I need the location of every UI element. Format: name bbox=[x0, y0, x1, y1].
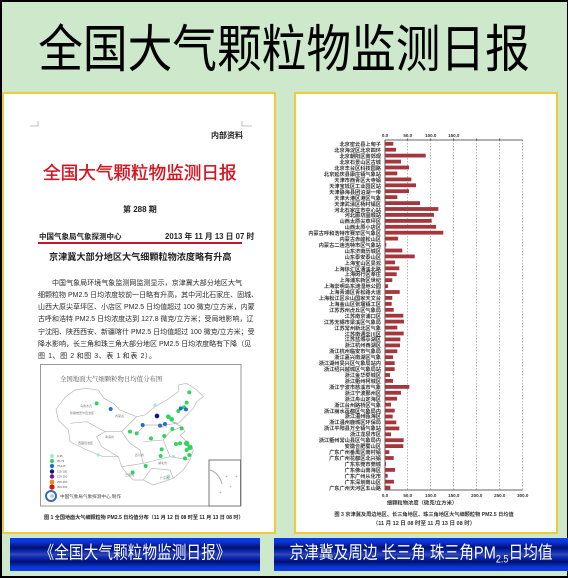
top axis labels: 50.0 bbox=[403, 133, 413, 138]
station labels: 上海青浦区青松路大道 bbox=[329, 288, 382, 296]
chart caption date: （11 月 12 日 08 时至 11 月 13 日 08 时） bbox=[373, 519, 475, 527]
station labels: 安徽合肥蜀山区 bbox=[345, 442, 381, 450]
station labels: 北京密云县上甸子 bbox=[339, 140, 381, 148]
bottom axis labels bbox=[382, 493, 529, 498]
station labels: 广东广州从化市 bbox=[345, 472, 381, 480]
station labels: 江苏盐城亭湖区 bbox=[345, 335, 381, 343]
station labels: 上海宝山区吴淞 bbox=[345, 259, 382, 267]
chart caption: 图 3 京津冀及周边地区、长三角地区、珠三角地区大气细颗粒物 PM2.5 日均值 bbox=[334, 510, 514, 518]
document page contents bbox=[30, 121, 258, 521]
banner: daily report: 《全国大气颗粒物监测日报》 bbox=[40, 544, 230, 564]
legend bbox=[49, 454, 68, 490]
station labels: 天津静海县团泊湖一带 bbox=[329, 188, 381, 196]
station labels: 天津武清区杨村镇区 bbox=[334, 200, 381, 208]
bottom axis labels: 150.0 bbox=[448, 493, 460, 498]
document red title: 全国大气颗粒物监测日报 bbox=[43, 163, 237, 183]
station labels: 江苏常州新北区气象 bbox=[334, 324, 382, 332]
bottom axis labels: 0.0 bbox=[382, 493, 389, 498]
station labels: 天津宝坻区工业园区站 bbox=[329, 182, 382, 190]
station labels: 上海松江区佘山国家天文台 bbox=[319, 294, 381, 302]
station labels: 浙江衢州常山县区气象局内 bbox=[319, 436, 381, 444]
station labels: 河北石家庄市中心站 bbox=[334, 206, 382, 214]
city labels bbox=[70, 403, 169, 480]
banner: PM2.5 daily average: 京津冀及周边 长三角 珠三角PM2.5日均值 bbox=[289, 544, 553, 565]
legend: 35-75 bbox=[57, 459, 65, 463]
city labels: 云南省 bbox=[125, 472, 134, 477]
city labels: 新疆维吾尔自治区 bbox=[70, 410, 94, 415]
city labels: 西藏自治区 bbox=[78, 440, 93, 445]
station labels: 广东东莞市莞城 bbox=[345, 460, 382, 468]
page corner marks bbox=[30, 121, 252, 126]
document headline: 京津冀大部分地区大气细颗粒物浓度略有升高 bbox=[49, 252, 232, 262]
top axis labels: 100.0 bbox=[425, 133, 437, 138]
china map bbox=[56, 383, 203, 485]
station labels: 上海崇明岛东滩湿地公园 bbox=[324, 282, 381, 290]
station labels bbox=[308, 140, 382, 492]
bottom axis labels: 50.0 bbox=[403, 493, 413, 498]
station labels: 江苏苏州虎丘区气象局 bbox=[329, 306, 381, 314]
city labels: 北京市 bbox=[158, 423, 167, 428]
station labels: 上海金山区张堰镇工区 bbox=[329, 300, 381, 308]
station labels: 江苏南京浦口区 bbox=[345, 312, 381, 320]
station labels: 山西太原尖草坪区 bbox=[339, 217, 381, 225]
station labels: 广东广州天河区五山路 bbox=[329, 484, 382, 492]
city labels: 四川省 bbox=[135, 452, 144, 457]
station labels: 江苏无锡市梁溪区气象局 bbox=[324, 318, 381, 326]
station labels: 江苏南通崇川区 bbox=[345, 330, 381, 338]
issuer: 中国气象局气象探测中心 bbox=[39, 232, 122, 241]
station labels: 广东广州番禺区南村镇 bbox=[329, 448, 382, 456]
banner: PM2.5 daily average bbox=[274, 538, 568, 571]
station labels: 浙江龙泉市区 bbox=[350, 430, 381, 438]
station labels: 浙江平阳县万全镇气象站 bbox=[324, 424, 382, 432]
grid lines bbox=[408, 140, 523, 490]
station labels: 浙江绍兴越城区气象局站 bbox=[324, 365, 382, 373]
station labels: 广东佛山南海区 bbox=[345, 466, 381, 474]
station labels: 上海浦东新区世纪 bbox=[339, 276, 382, 284]
station labels: 山东泰安泰山区 bbox=[345, 253, 381, 261]
logo bbox=[46, 491, 56, 501]
top axis labels: 0.0 bbox=[382, 133, 389, 138]
axis title: 细颗粒物浓度（微克/立方米） bbox=[387, 498, 457, 506]
station labels: 北京延庆县康庄镇气象站 bbox=[324, 170, 382, 178]
body paragraph: 图 1、图 2 和图 3、表 1 和表 2）。 bbox=[38, 353, 156, 360]
station labels: 山东济南历城区 bbox=[345, 247, 381, 255]
legend: 350-500 bbox=[57, 485, 68, 489]
label: internal document: 内部资料 bbox=[211, 131, 243, 140]
date: 2013 年 11 月 13 日 07 时 bbox=[165, 232, 254, 241]
axes bbox=[385, 138, 523, 490]
legend: 150-250 bbox=[57, 474, 68, 478]
station labels: 浙江宁波市慈溪市气象 bbox=[329, 383, 382, 391]
body paragraph: 山西大原尖草坪区、小店区 PM2.5 日均值超过 100 微克/立方米，内蒙 bbox=[38, 304, 255, 311]
station labels: 北京海淀区北京四环 bbox=[334, 146, 381, 154]
station labels: 上海闵行区莘庄 bbox=[345, 270, 381, 278]
station labels: 广东深圳南山区 bbox=[345, 478, 381, 486]
station labels: 浙江金华婺城区 bbox=[345, 371, 381, 379]
producer credit: 中国气象局气象探测中心 制作 bbox=[60, 493, 121, 500]
station labels: 浙江丽水莲都区气象局内 bbox=[324, 407, 381, 415]
issue number: 第 288 期 bbox=[123, 205, 157, 214]
station labels: 浙江温州鹿城区环保局 bbox=[329, 418, 381, 426]
body paragraph: 中国气象局环境气象监测网监测显示，京津冀大部分地区大气 bbox=[52, 280, 242, 287]
station labels: 北京石景山区古城 bbox=[339, 158, 382, 166]
map figure bbox=[40, 364, 242, 506]
station labels: 北京丰台区科技园路 bbox=[334, 164, 382, 172]
red rule bbox=[38, 242, 242, 244]
station labels: 上海徐汇区漕溪北路 bbox=[334, 265, 382, 273]
station labels: 浙江杭州临安市气象局 bbox=[329, 347, 381, 355]
station labels: 内蒙古二连浩特市区气象站 bbox=[319, 241, 382, 249]
station labels: 浙江衢州柯城区 bbox=[345, 377, 381, 385]
station labels: 浙江宁波鄞州区 bbox=[345, 389, 381, 397]
station labels: 山西太原小店区 bbox=[345, 223, 381, 231]
panel: PM2.5 bar chart page bbox=[294, 92, 558, 534]
station labels: 浙江台州路桥区气象 bbox=[334, 401, 382, 409]
legend: 75-115 bbox=[57, 464, 66, 468]
station labels: 天津大港区港区气象 bbox=[334, 194, 382, 202]
legend: 250-350 bbox=[57, 480, 68, 484]
station labels: 浙江杭州西湖区 bbox=[345, 341, 381, 349]
bottom axis labels: 250.0 bbox=[494, 493, 506, 498]
city labels: 青海省 bbox=[105, 434, 114, 439]
station labels: 内蒙古赤峰松山区 bbox=[339, 235, 381, 243]
top axis labels: 150.0 bbox=[448, 133, 460, 138]
station labels: 浙江舟山定海区 bbox=[345, 395, 381, 403]
city labels: 内蒙古 bbox=[115, 413, 124, 418]
station labels: 浙江嘉兴南湖区气象 bbox=[334, 353, 382, 361]
top axis labels bbox=[382, 133, 460, 138]
panel: daily report document bbox=[2, 92, 276, 534]
legend: 115-150 bbox=[57, 470, 68, 474]
body paragraph: 古呼和浩特 PM2.5 日均浓度达到 127.8 微克/立方米；受局地影响，辽 bbox=[38, 316, 253, 323]
city labels: 乌鲁木齐 bbox=[80, 403, 92, 408]
legend: 0-35 bbox=[57, 454, 63, 458]
bottom axis labels: 300.0 bbox=[517, 493, 529, 498]
station labels: 天津市西青区大寺镇 bbox=[334, 176, 382, 184]
station labels: 浙江温州瓯海区 bbox=[345, 412, 381, 420]
station markers bbox=[95, 390, 193, 479]
title: 全国大气颗粒物监测日报 bbox=[38, 22, 530, 79]
city labels: 广东省 bbox=[160, 475, 169, 480]
south china sea inset bbox=[209, 460, 240, 506]
body paragraph: 降水影响，长三角和珠三角大部分地区 PM2.5 日均浓度略有下降（见 bbox=[38, 341, 251, 348]
station labels: 广东广州花都区北兴镇 bbox=[329, 454, 382, 462]
city labels: 湖北省 bbox=[158, 460, 167, 465]
bars bbox=[385, 142, 443, 490]
banner: daily report bbox=[10, 538, 260, 571]
station labels: 浙江湖州吴兴区气象局站内 bbox=[319, 359, 381, 367]
station labels: 北京朝阳区南郊观 bbox=[339, 152, 382, 160]
station labels: 内蒙古呼和浩特市赛罕区气象区 bbox=[308, 229, 381, 237]
body paragraph bbox=[38, 279, 258, 360]
station labels: 河北廊坊固城站 bbox=[345, 211, 382, 219]
body paragraph: 宁沈阳、陕西西安、新疆喀什 PM2.5 日均值超过 100 微克/立方米；受 bbox=[38, 329, 255, 336]
bottom axis labels: 200.0 bbox=[471, 493, 483, 498]
map title: 全国地面大气细颗粒物日均值分布图 bbox=[60, 374, 162, 383]
bottom axis labels: 100.0 bbox=[425, 493, 437, 498]
map caption: 图 1 全国地面大气细颗粒物 PM2.5 日均值分布（11 月 12 日 08 时至 11 月 13 日 08 时） bbox=[44, 515, 244, 521]
body paragraph: 细颗粒物 PM2.5 日均浓度较前一日略有升高，其中河北石家庄、固城、 bbox=[38, 292, 258, 299]
